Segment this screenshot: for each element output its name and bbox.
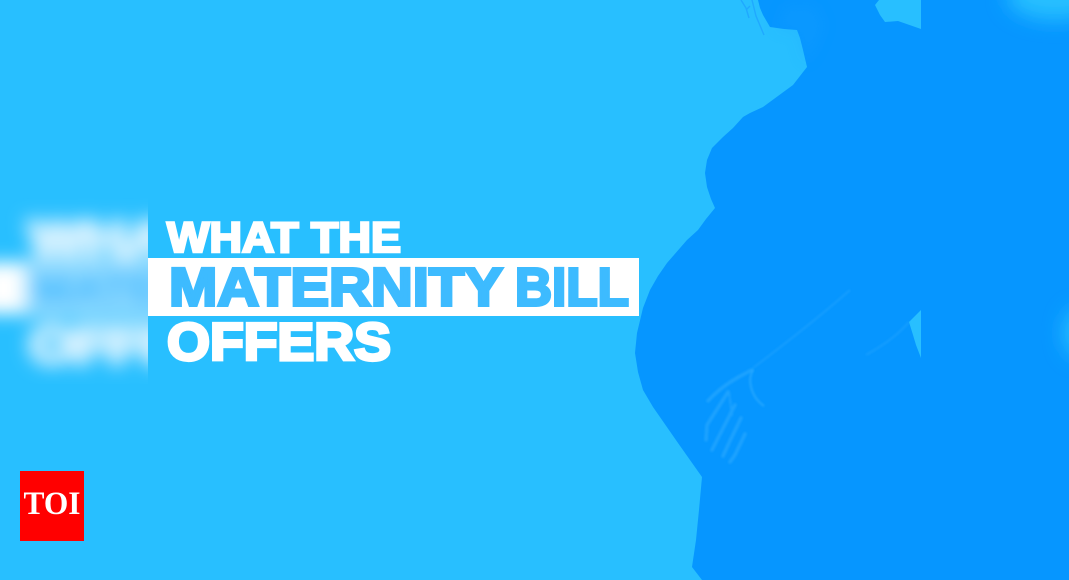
blurred right panel: [921, 0, 1069, 580]
title: [148, 214, 639, 372]
logo red square: [20, 471, 84, 541]
blurred left panel: MATERNITY: [34, 265, 294, 314]
hand with fingers: [706, 370, 752, 462]
arm outline: [753, 290, 909, 368]
blurred left panel: OFFERS: [30, 317, 260, 373]
blurred highlight: top right: [1007, 0, 1069, 20]
hair strands: [741, 0, 764, 35]
blurred left panel: WHAT THE: [30, 214, 330, 267]
silhouette body: [635, 0, 921, 580]
silhouette of pregnant woman: [635, 0, 921, 580]
blurred left panel: [0, 206, 148, 379]
TOI logo: [20, 471, 84, 541]
title line: MATERNITY: MATERNITY: [169, 258, 503, 318]
wrist curve: [750, 370, 764, 406]
title bar: [148, 258, 639, 316]
title line: BILL: BILL: [515, 258, 629, 318]
shading: neck: [775, 5, 825, 65]
logo text: TOI: [24, 486, 80, 522]
blurred highlight: mid right: [1064, 309, 1069, 357]
title line: WHAT THE: WHAT THE: [167, 214, 401, 262]
title line: OFFERS: OFFERS: [167, 313, 391, 372]
